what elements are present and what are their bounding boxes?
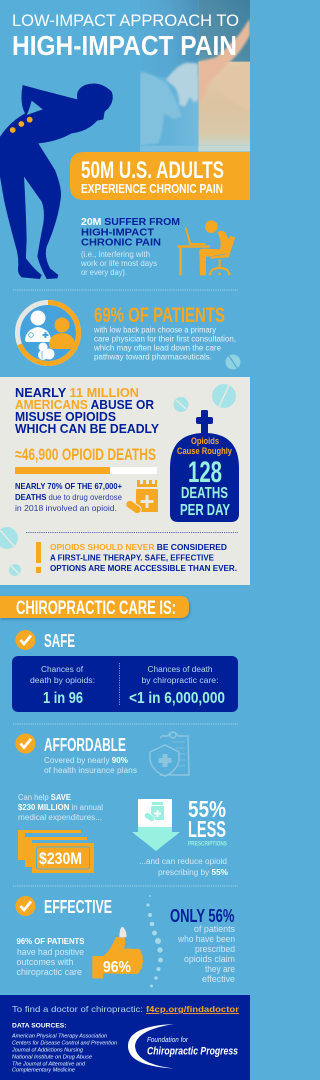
data sources [11,1022,117,1074]
text block: 96% of patients: outcomes with [16,957,74,967]
icon: stack of money $230M [18,830,94,873]
callout: opioids should never: OPTIONS ARE MORE ACCESSIBLE THAN EVER. [50,564,237,573]
page background [0,0,250,1080]
text block: 69% of patients: with low back pain choose a primary [93,326,216,334]
stat: 46,900 opioid deaths: ≈46,900 OPIOID DEATHS [15,445,156,464]
logo: Foundation for Chiropractic Progress [128,1024,238,1068]
stat: 55% less prescriptions: LESS [188,816,226,842]
text block: 20M high-impact chronic pain: 20M SUFFER FROM [81,216,180,228]
icon: bent-over figure with back pain [0,83,113,279]
heading: affordable [16,734,126,755]
divider [26,532,238,534]
text block: 96% of patients: 96% OF PATIENTS [16,936,85,946]
text block: only 56%: effective [202,974,235,985]
text block: saves 230 million: Can help SAVE [18,793,72,802]
callout: 50M U.S. adults [70,152,250,200]
text block: 20M high-impact chronic pain [80,216,180,277]
text block: insurance coverage: of health insurance plans [44,766,137,775]
panel: chances of death comparison: Chances of [41,665,84,674]
icon: tombstone with 128 deaths per day: Opioids [191,436,219,446]
stat: 55% less prescriptions: 55% [188,796,226,822]
text block: saves 230 million: $230 MILLION in annual [18,803,103,812]
panel: chances of death comparison: Chances of death [148,665,212,674]
icon: stack of money $230M: $230M [39,849,82,868]
text block: 96% of patients: chiropractic care [16,967,82,977]
divider [13,723,238,725]
icon: tombstone with 128 deaths per day: DEATHS [181,485,228,502]
panel: chances of death comparison [12,656,238,712]
text block: saves 230 million [18,793,103,822]
data sources: American Physical Therapy Association [11,1034,107,1040]
logo: Foundation for Chiropractic Progress: Foundation for [147,1037,189,1044]
data sources: The Journal of Alternative and [12,1062,86,1068]
callout: opioids should never: OPIOIDS SHOULD NEVER BE CONSIDERED [50,543,227,552]
data sources: Centers for Disease Control and Prevention [12,1040,117,1046]
text block: 70% of deaths: NEARLY 70% OF THE 67,000+ [15,481,122,491]
icon: doctor and patient ring (69%) [18,302,78,364]
text block: 20M high-impact chronic pain: (i.e., interfering with [81,250,150,259]
text block: 70% of deaths: DEATHS due to drug overdose [15,492,122,502]
heading: safe: SAFE [44,631,75,651]
icon: tombstone with 128 deaths per day: 128 [188,456,222,489]
data sources: Journal of Addictions Nursing [11,1048,83,1054]
panel: opioid statistics [0,354,250,585]
icon: tombstone with 128 deaths per day [170,410,239,522]
panel: footer [0,995,250,1080]
text block: only 56%: they are [205,964,235,975]
text block: reduce opioid prescribing: prescribing by 55% [158,868,228,877]
icon: exclamation mark [36,542,41,573]
heading: 11 million Americans: AMERICANS ABUSE OR [15,398,154,412]
heading: effective: EFFECTIVE [44,897,112,917]
dotted arc decoration [146,895,163,988]
data sources: National Institute on Drug Abuse [12,1054,92,1060]
text block: 69% of patients: care physician for their first consultation, [94,334,236,344]
text block: only 56%: opioids claim [184,954,235,965]
icon: tombstone with 128 deaths per day: Cause Roughly [177,446,232,456]
stat: 55% less prescriptions [188,796,227,848]
text block: 20M high-impact chronic pain: CHRONIC PAIN [81,236,161,248]
heading: safe [16,630,75,651]
panel: chances of death comparison: 1 in 96 [43,690,83,707]
heading: 11 million Americans: WHICH CAN BE DEADLY [15,422,160,436]
find a doctor link: To find a doctor of chiropractic: [12,1004,143,1014]
find a doctor link: f4cp.org/findadoctor [146,1004,240,1014]
icon: person at desk with back pain [177,220,235,275]
stat: 55% less prescriptions: PRESCRIPTIONS [188,842,227,848]
callout: opioids should never: A FIRST-LINE THERAPY. SAFE, EFFECTIVE [50,554,215,562]
text block: 70% of deaths [15,481,122,513]
text block: 96% of patients: have had positive [17,947,84,957]
heading: effective [16,896,112,917]
icon: thumbs up 96% [92,927,143,978]
text block: insurance coverage [44,756,137,775]
text block: 20M high-impact chronic pain: or every day). [81,268,127,277]
title: LOW-IMPACT APPROACH TO [12,11,239,30]
panel: chances of death comparison: <1 in 6,000,000 [129,690,225,707]
icon: pill bottle [124,480,158,515]
panel: chances of death comparison: death by opioids: [30,676,95,685]
icon: shield and clipboard [150,732,189,776]
text block: 69% of patients [93,304,236,362]
callout: opioids should never [50,543,237,573]
text block: reduce opioid prescribing: ...and can reduce opioid [139,857,227,866]
text block: only 56% [170,906,235,985]
text block: reduce opioid prescribing [139,857,228,877]
title [12,11,239,61]
data sources: DATA SOURCES: [12,1022,66,1030]
text block: only 56%: prescribed [195,944,235,955]
heading banner: chiropractic care is [0,596,189,619]
panel: chances of death comparison: by chiropractic care: [142,676,218,685]
heading: affordable: AFFORDABLE [44,735,126,755]
divider [13,885,238,887]
text block: 20M high-impact chronic pain: work or life most days [80,259,157,268]
heading: 11 million Americans: MISUSE OPIOIDS [15,410,116,424]
text block: 96% of patients [16,936,85,977]
icon: floating pills [0,354,240,576]
icon: down arrow with pill bottle [132,799,180,851]
heading: 11 million Americans: NEARLY 11 MILLION [15,386,139,400]
divider [13,289,238,291]
icon: tombstone with 128 deaths per day: PER DAY [180,502,230,519]
text block: only 56%: who have been [177,934,235,945]
text block: 70% of deaths: in 2018 involved an opioid. [15,503,117,513]
text block: 20M high-impact chronic pain: HIGH-IMPACT [81,226,155,238]
hero photo: chiropractor hands on back [140,0,250,152]
heading banner: chiropractic care is: CHIROPRACTIC CARE IS: [16,597,176,619]
text block: 69% of patients: pathway toward pharmaceuticals. [94,352,212,362]
bar chart: share of overdose deaths [15,467,157,474]
heading: 11 million Americans [15,386,160,436]
icon: thumbs up 96%: 96% [103,959,131,976]
find a doctor link [12,1004,240,1014]
text block: only 56%: of patients [194,924,235,935]
text block: insurance coverage: Covered by nearly 90% [44,756,128,765]
text block: 69% of patients: which may often lead down the care [93,344,221,352]
data sources: Complementary Medicine [12,1068,75,1074]
text block: saves 230 million: medical expenditures... [18,813,102,822]
